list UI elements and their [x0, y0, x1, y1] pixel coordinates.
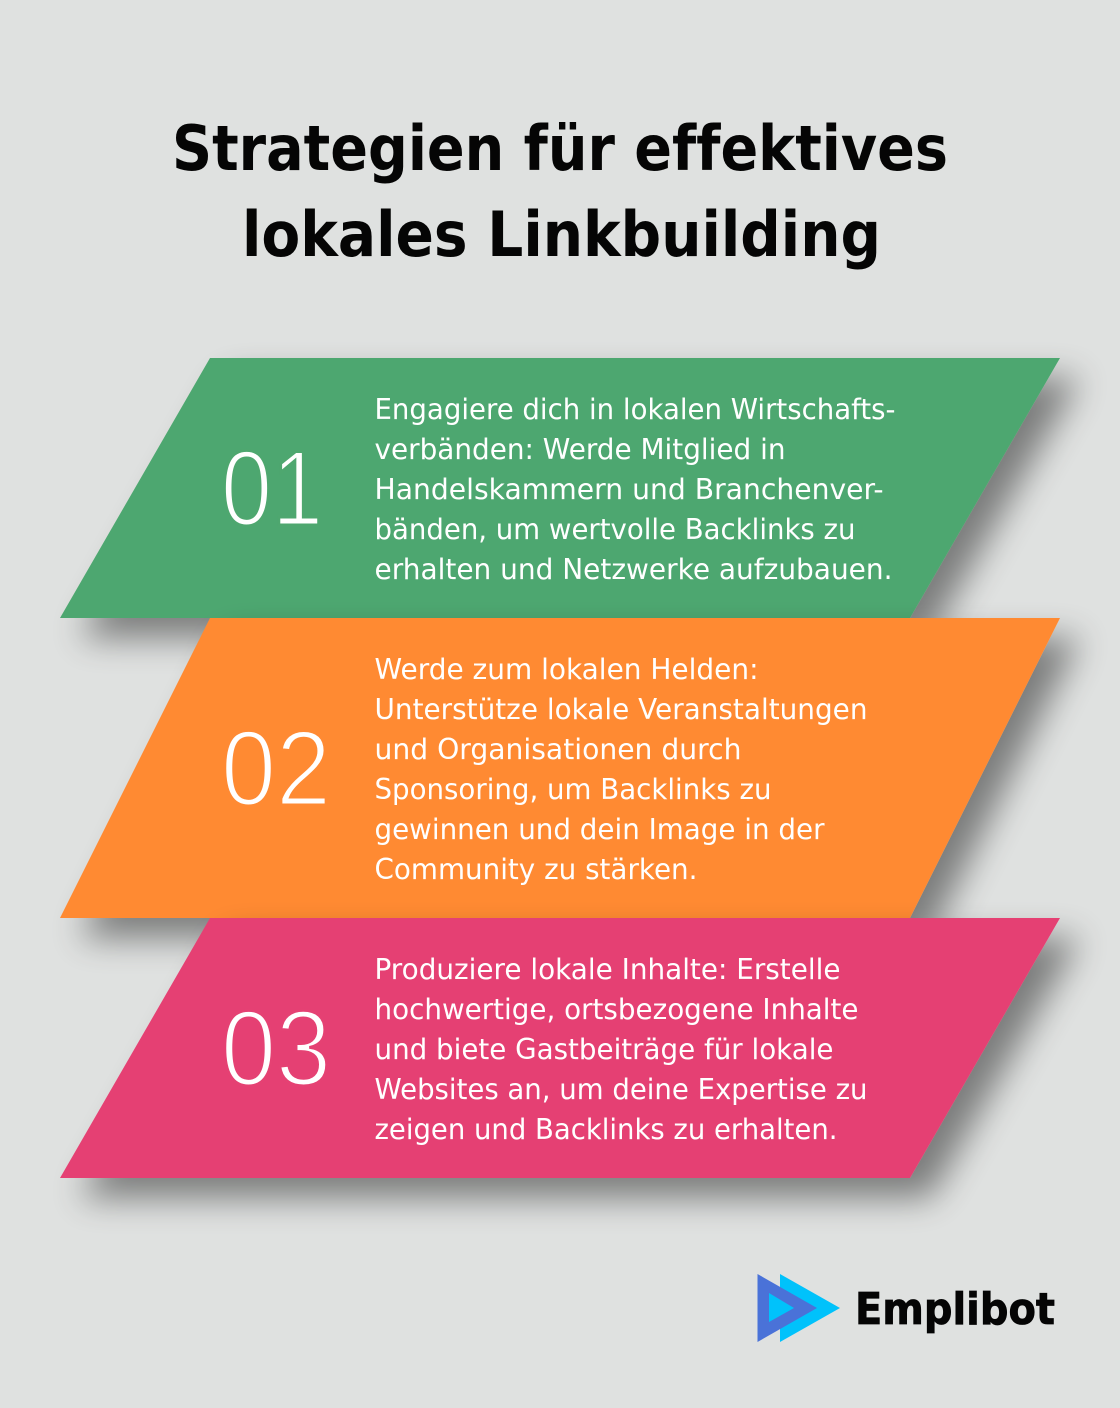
title: Strategien für effektives	[172, 112, 948, 185]
wordmark: Emplibot	[855, 1284, 1055, 1335]
text: step 02: Community zu stärken.	[374, 853, 698, 886]
icon: play triangles	[758, 1274, 840, 1342]
text: step 03	[374, 953, 868, 1146]
title: lokales Linkbuilding	[242, 198, 881, 271]
title	[172, 112, 948, 271]
panel: step 03	[60, 918, 1060, 1178]
text: step 02: Unterstütze lokale Veranstaltungen	[374, 693, 868, 726]
text: step 02: Werde zum lokalen Helden:	[374, 653, 758, 686]
pink parallelogram	[60, 918, 1060, 1178]
logo: Emplibot	[758, 1274, 1055, 1342]
text: step 03: und biete Gastbeiträge für lokale	[374, 1033, 834, 1066]
text: step 01: verbänden: Werde Mitglied in	[374, 433, 786, 466]
text: step 03: zeigen und Backlinks zu erhalten.	[374, 1113, 838, 1146]
text: step 01	[374, 393, 896, 586]
number 02: 02	[221, 708, 331, 828]
orange parallelogram	[60, 618, 1060, 918]
number 01: 01	[221, 428, 323, 548]
text: step 02: gewinnen und dein Image in der	[374, 813, 825, 846]
panel: step 01	[60, 358, 1060, 618]
text: step 02: und Organisationen durch	[374, 733, 742, 766]
text: step 01: Handelskammern und Branchenver-	[374, 473, 884, 506]
number 03: 03	[221, 988, 331, 1108]
text: step 02: Sponsoring, um Backlinks zu	[374, 773, 772, 806]
text: step 03: hochwertige, ortsbezogene Inhalte	[374, 993, 858, 1026]
text: step 03: Websites an, um deine Expertise zu	[374, 1073, 868, 1106]
text: step 01: bänden, um wertvolle Backlinks zu	[374, 513, 856, 546]
green parallelogram	[60, 358, 1060, 618]
text: step 01: Engagiere dich in lokalen Wirtschafts-	[374, 393, 896, 426]
text: step 03: Produziere lokale Inhalte: Erstelle	[374, 953, 840, 986]
panel: step 02	[60, 618, 1060, 918]
text: step 01: erhalten und Netzwerke aufzubauen.	[374, 553, 892, 586]
text: step 02	[374, 653, 868, 886]
